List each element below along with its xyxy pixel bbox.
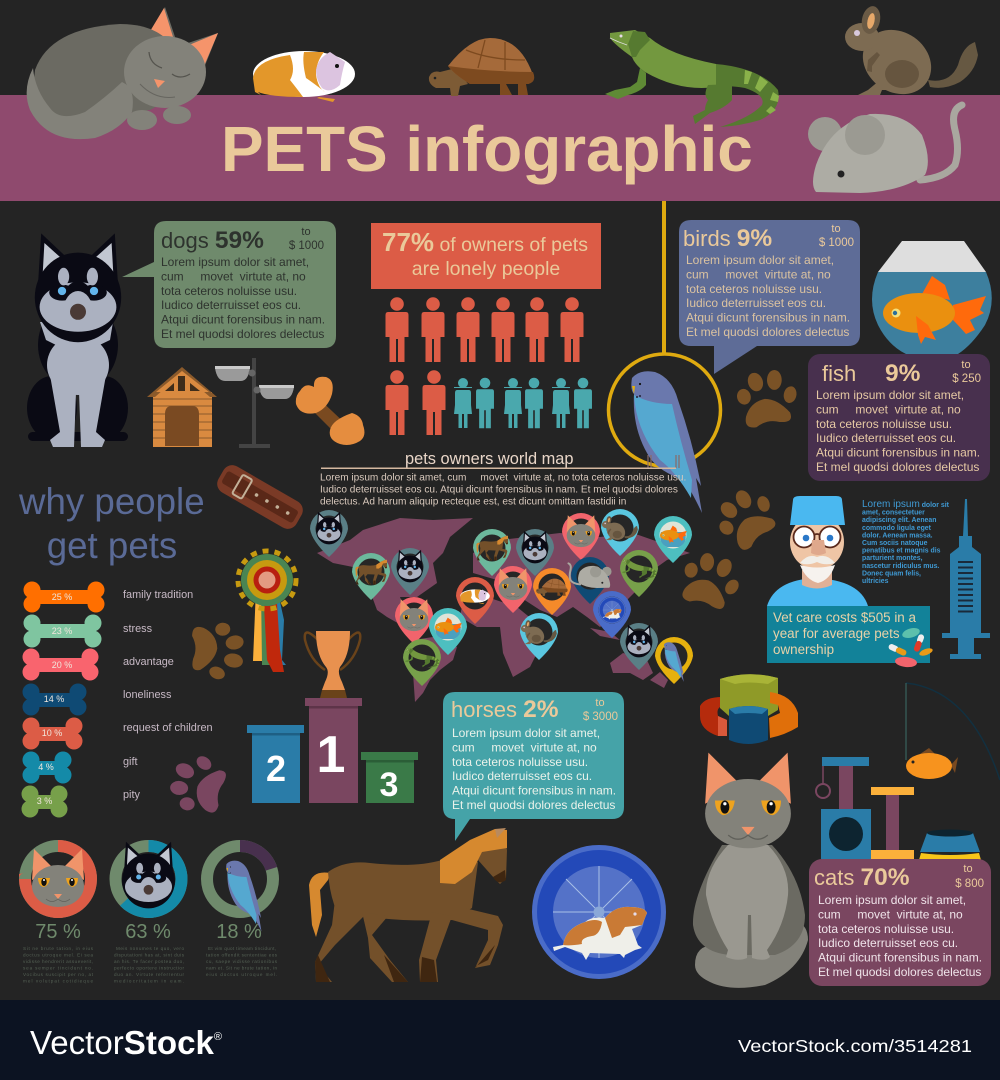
illustration: budgie on hanging ring [608,201,720,513]
text: vet lorem: penatibus et magnis dis [862,548,941,554]
panel: cats: $ 800 [955,878,984,890]
chart: world map [317,518,690,702]
text: vet lorem: adipiscing elit. Aenean [862,517,936,524]
donut: cats 75%: vidisse hendrerit assueverit, [23,959,93,964]
donut: cats 75%: Vocibus suscipit per no, at [23,972,94,977]
bone bar labels [123,589,213,801]
heading: why people get pets: why people [18,481,205,522]
text: vet lorem: parturient montes, [862,555,923,562]
panel: cats: Iudico deterruisset eos cu. [818,936,958,950]
panel: cats: cats 70% [814,864,910,891]
panel: birds: birds 9% [683,225,772,252]
icon: trophy [305,631,360,698]
panel: dogs: $ 1000 [289,240,324,252]
banner [0,95,1000,201]
chart: bone bars: 4 % [38,762,54,772]
podium: 3 [380,766,398,804]
text: vet lorem: dolor. Aenean massa. [862,532,933,540]
panel: cats: cum movet virtute at, no [818,907,963,921]
pictogram: people [386,297,592,435]
panel: cats: Lorem ipsum dolor sit amet, [818,893,966,907]
text: vet lorem: amet, consectetuer [862,510,925,516]
donut: cats 75%: doctus utroque mel. Ei sea [23,952,93,958]
panel: fish: Atqui dicunt forensibus in nam. [816,446,980,460]
illustration: chinchilla [845,4,978,107]
illustration: iguana [605,30,779,127]
panel: fish: Iudico deterruisset eos cu. [816,431,956,445]
text: vet lorem: ultricies [862,578,889,585]
panel: dogs: Iudico deterruisset eos cu. [161,298,301,312]
donut: cats 75% [23,846,94,984]
footer: VectorStock [30,1024,214,1061]
chart: bone bars: 23 % [52,626,72,636]
bone bar labels: gift [123,756,138,768]
donut: birds 18%: Et vim quot timeam tincidunt, [208,946,276,951]
icon: bowl stand [215,358,294,448]
panel: horses: Et mel quodsi dolores delectus [452,798,615,812]
donut: dogs 63%: disputationi has at, sint duis [114,952,185,958]
panel: cats [809,859,991,986]
bone bar labels: advantage [123,656,174,668]
panel: cats: Et mel quodsi dolores delectus [818,965,981,979]
icon: food chart [700,674,798,744]
text: vet lorem: Cum sociis natoque [862,540,928,547]
chart: bone bars: 10 % [42,728,62,738]
text: vet lorem: Donec quam felis, [862,570,921,578]
panel: horses: tota ceteros noluisse usu. [452,755,588,769]
donut: dogs 63%: 63 % [125,921,171,943]
panel: horses: horses 2% [451,696,559,723]
donut: birds 18%: cu, saepe vidisse rationibus [206,959,278,964]
illustration: seated cat [693,753,808,988]
bone bar labels: pity [123,789,141,801]
podium [247,698,418,804]
icon: paw print [707,480,786,557]
panel: fish: tota ceteros noluisse usu. [816,417,952,431]
donut: birds 18%: 18 % [216,921,262,943]
icon: dog house [147,367,217,447]
chart: bone bars: 3 % [37,796,52,806]
chart: bone bars: 25 % [52,592,72,602]
icon: cat bowl [919,830,981,860]
panel: birds: Lorem ipsum dolor sit amet, [686,253,834,267]
panel: horses: Iudico deterruisset eos cu. [452,769,592,783]
panel: dogs: Et mel quodsi dolores delectus [161,327,324,341]
panel: horses: cum movet virtute at, no [452,740,597,754]
panel: world map heading and intro: Iudico deterruisset eos cu. Atqui dicunt forensibus in nam. Et mel quodsi dolores [320,484,678,496]
panel: vet care cost: year for average pets [773,626,900,641]
illustration: fishing toy [906,683,1000,780]
panel: vet care cost: Vet care costs $505 in a [773,610,916,625]
text: vet lorem: nascetur ridiculus mus. [862,563,939,570]
panel: fish: to [961,359,971,371]
illustration: vet doctor [767,496,868,606]
panel: fish [808,354,990,481]
pins: pets on world map [310,509,693,686]
panel: fish: $ 250 [952,373,981,385]
panel: birds: Atqui dicunt forensibus in nam. [686,311,850,325]
icon: rosette [238,551,296,672]
donut: cats 75%: 75 % [35,921,81,943]
bone bar labels: loneliness [123,689,172,701]
icon: paw print [161,746,235,824]
panel: horses: to [595,697,605,709]
donut: cats 75%: sea semper tincidunt no. [23,966,93,970]
bone bar labels: family tradition [123,589,193,601]
panel: cats: to [963,863,973,875]
illustration: tortoise [429,38,534,96]
illustration: mouse [808,105,962,193]
footer [0,1000,1000,1080]
panel: dogs: Lorem ipsum dolor sit amet, [161,255,309,269]
icon: bone treat [296,377,364,445]
chart: bone bars: 20 % [52,660,72,670]
panel: birds: Iudico deterruisset eos cu. [686,296,826,310]
text: vet lorem [862,499,950,585]
illustration: husky dog [27,233,128,447]
panel: horses [443,692,624,841]
bone bar labels: stress [123,623,153,635]
panel: fish: fish [822,361,856,386]
panel: fish: cum movet virtute at, no [816,402,961,416]
heading: why people get pets: get pets [47,525,177,566]
illustration: guinea pig [253,51,355,102]
donut: dogs 63%: an his. Te facer postea duo, [114,959,184,964]
donut: birds 18%: eius doctus utroque mel. [206,972,277,977]
panel: vet care cost: ownership [773,642,834,657]
panel: birds [679,220,860,374]
panel: vet care cost [767,606,930,663]
panel: lonely owners stat: are lonely people [412,258,560,280]
icon: syringe [942,499,990,659]
panel: dogs: cum movet virtute at, no [161,269,306,283]
icon: cat tree [816,757,914,859]
chart: bone bars [22,582,104,818]
panel: birds: $ 1000 [819,237,854,249]
panel: lonely owners stat [371,223,601,289]
panel: fish: 9% [885,360,921,387]
icon: paw print [185,616,249,684]
panel: horses: Lorem ipsum dolor sit amet, [452,726,600,740]
panel: world map heading and intro: delectus. Ad harum aliquip recteque est, est dicunt omittam fastidii in [320,496,626,508]
panel: birds: tota ceteros noluisse usu. [686,282,822,296]
panel: birds: cum movet virtute at, no [686,267,831,281]
heading: why people get pets [18,481,205,566]
panel: dogs [122,221,336,348]
icon: pills [888,626,934,668]
podium: 1 [317,726,345,784]
panel: dogs: Atqui dicunt forensibus in nam. [161,313,325,327]
footer: ® [214,1031,222,1043]
icon: paw print [735,370,798,428]
icon: paw print [671,544,749,618]
panel: horses: $ 3000 [583,711,618,723]
panel: cats: tota ceteros noluisse usu. [818,922,954,936]
panel: horses: Atqui dicunt forensibus in nam. [452,784,616,798]
panel: dogs: tota ceteros noluisse usu. [161,284,297,298]
donut: dogs 63%: Meis nonumes te quo, vero [116,946,184,951]
panel: birds: Et mel quodsi dolores delectus [686,325,849,339]
panel: dogs: dogs 59% [161,227,264,254]
donut: dogs 63% [114,842,185,984]
panel: world map heading and intro: Lorem ipsum dolor sit amet, cum movet virtute at, no tota ceteros noluisse usu. [320,472,686,484]
chart: bone bars: 14 % [44,694,64,704]
panel: birds: to [831,223,841,235]
panel: dogs: to [301,226,311,238]
text: vet lorem: commodo ligula eget [862,525,932,532]
panel: world map heading and intro [320,450,686,508]
illustration: sleeping cat [27,7,218,139]
panel: fish: Et mel quodsi dolores delectus [816,460,979,474]
donut: cats 75%: Sit ne brute tation, in eius [23,946,94,951]
donut: dogs 63%: duo an. Virtute referrentur [114,972,184,977]
donut: cats 75%: mel volutpat cotidieque [23,978,93,984]
donut: dogs 63%: perfecto oportere instructior [114,966,184,970]
podium: 2 [266,748,286,789]
donut: dogs 63%: mediocritatem in eam. [114,978,184,984]
panel: cats: Atqui dicunt forensibus in nam. [818,951,982,965]
donut: birds 18% [206,846,278,977]
panel: world map heading and intro: pets owners world map [405,450,574,468]
illustration: fish bowl [872,241,992,354]
footer: VectorStock.com/3514281 [738,1036,972,1056]
illustration: horse [309,828,507,982]
title: PETS infographic [221,113,753,185]
illustration: hamster wheel [534,848,664,976]
text: vet lorem: Lorem ipsum dolor sit [862,499,950,510]
bone bar labels: request of children [123,722,213,734]
donut: birds 18%: nam et. Sit ne brute tation, in [206,966,277,970]
donut: birds 18%: tation offendit sententiae eos [206,952,278,958]
panel: fish: Lorem ipsum dolor sit amet, [816,388,964,402]
icon: dog collar [214,462,306,532]
panel: lonely owners stat: 77% of owners of pets [382,227,588,257]
